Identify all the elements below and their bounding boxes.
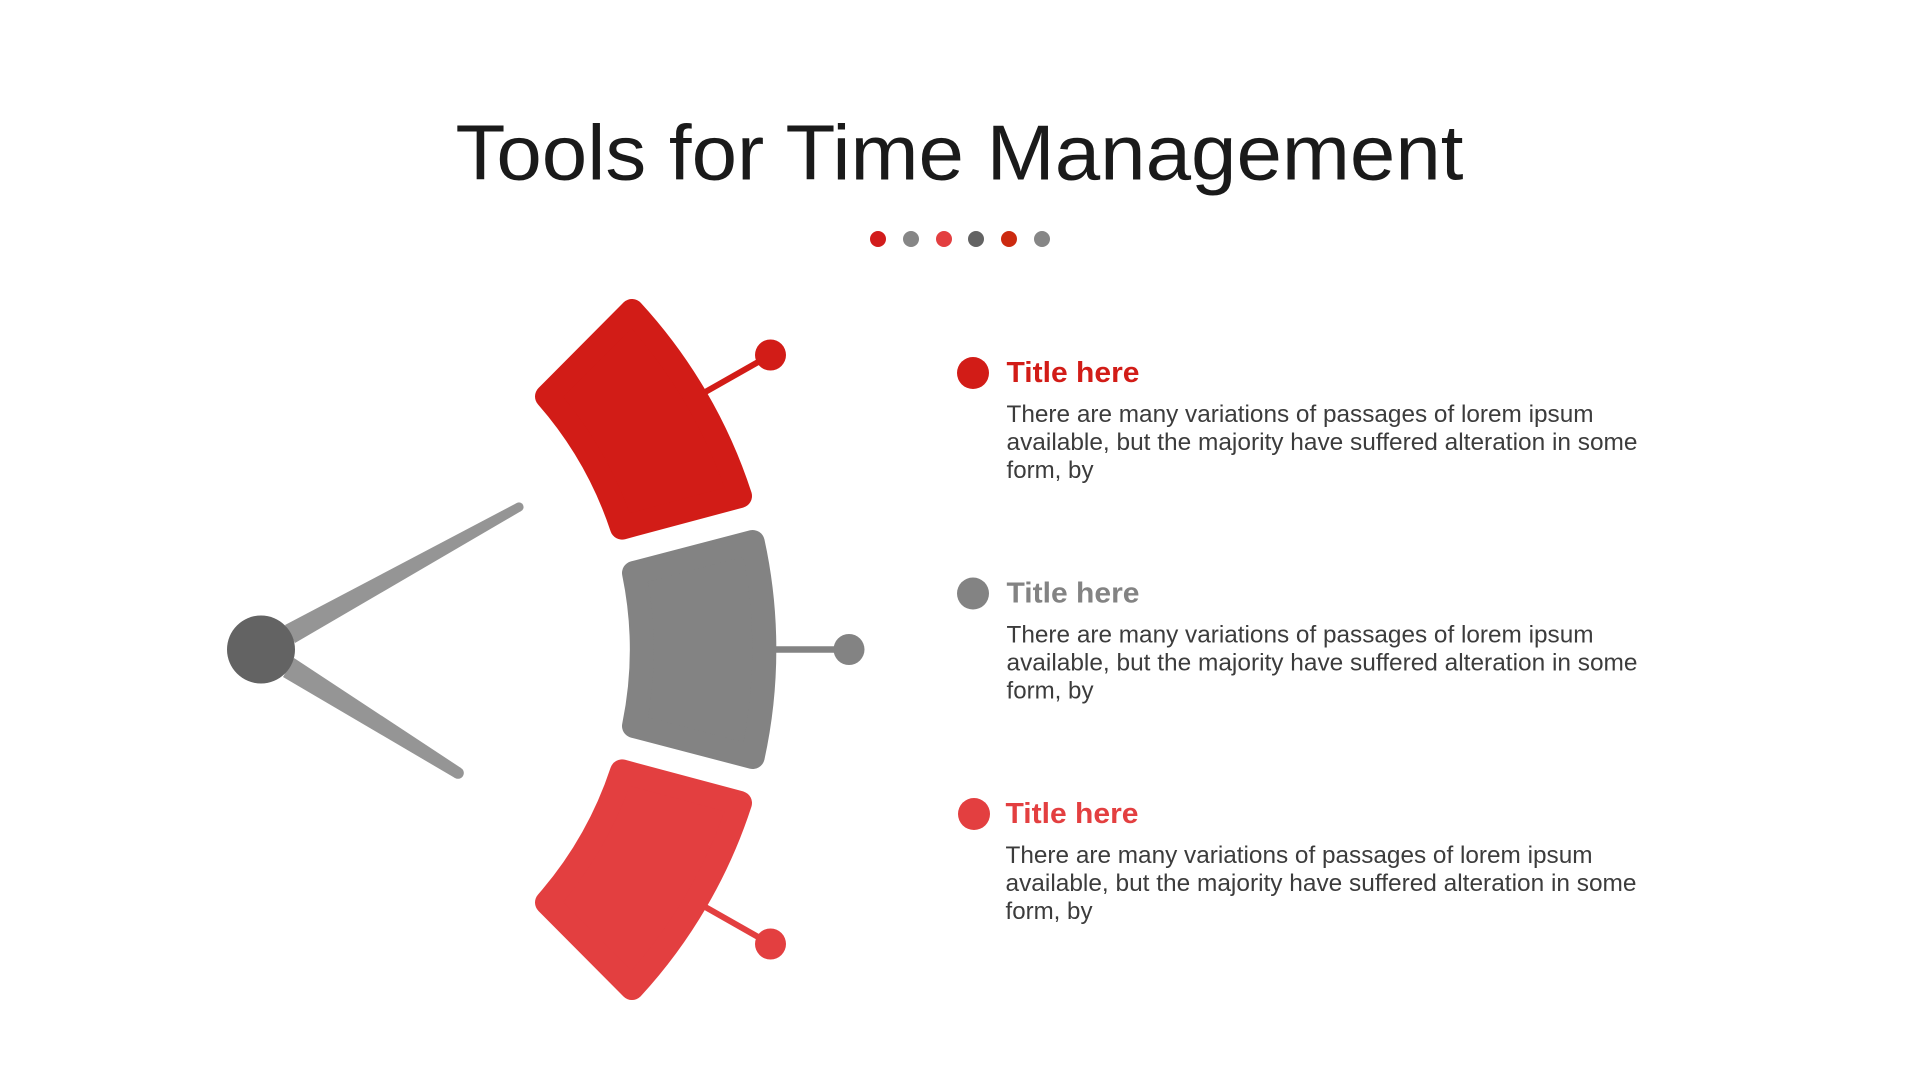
connector: middle — [770, 634, 864, 665]
body 1: available, but the majority have suffered alteration in some — [1006, 429, 1638, 456]
body 1: There are many variations of passages of lorem ipsum — [1006, 401, 1594, 428]
text block: item 3 — [958, 798, 1636, 925]
segment: bottom red — [547, 771, 786, 988]
text block: item 2 — [957, 578, 1638, 704]
arc block: middle — [634, 542, 764, 757]
arc block: bottom — [547, 771, 740, 988]
body 2: form, by — [1006, 678, 1094, 704]
body 1 — [1006, 401, 1638, 484]
arc block: top — [547, 311, 740, 528]
connector: top — [700, 340, 786, 395]
body 3: form, by — [1006, 898, 1092, 925]
body 3: available, but the majority have suffered alteration in some — [1006, 870, 1636, 897]
bullet 1 — [957, 357, 989, 389]
body 3: There are many variations of passages of lorem ipsum — [1006, 842, 1592, 869]
heading 2: Title here — [1006, 578, 1140, 610]
segment: top red — [547, 311, 786, 528]
title: Tools for Time Management — [456, 108, 1464, 196]
heading 3: Title here — [1006, 798, 1138, 830]
pivot — [227, 616, 295, 684]
body 2 — [1006, 622, 1638, 704]
upper hand — [285, 502, 524, 643]
text block: item 1 — [957, 357, 1638, 484]
body 1: form, by — [1006, 457, 1094, 484]
body 2: There are many variations of passages of lorem ipsum — [1006, 622, 1594, 648]
icon: clock hands and pivot — [227, 502, 524, 779]
lower hand — [283, 658, 464, 779]
segment: middle gray — [634, 542, 864, 757]
bullet 2 — [957, 578, 989, 610]
heading 1: Title here — [1006, 357, 1140, 389]
body 2: available, but the majority have suffered alteration in some — [1006, 650, 1638, 676]
bullet 3 — [958, 798, 990, 830]
body 3 — [1006, 842, 1636, 925]
decorative dot row — [870, 231, 1050, 247]
connector: bottom — [700, 904, 786, 960]
